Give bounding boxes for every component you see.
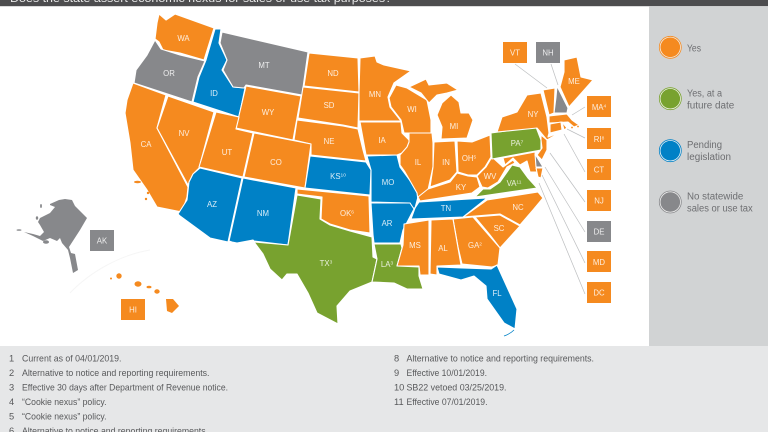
state: NJ: [537, 135, 547, 160]
state: TX: TX: [320, 259, 330, 268]
legend item: Yes, at a future date: future date: [687, 100, 735, 112]
state: PA: [491, 127, 541, 159]
legend item: Yes: [659, 36, 701, 58]
state: SC: SC: [494, 224, 505, 233]
state: SD: [298, 87, 359, 128]
callout: NH: NH: [542, 48, 554, 58]
state: CO: [244, 133, 311, 188]
state: MD: [503, 152, 543, 178]
callout: AK: AK: [97, 236, 108, 246]
state: NE: [294, 120, 366, 161]
state: IA: IA: [378, 136, 386, 145]
legend item: Yes, at a future date: [659, 88, 735, 112]
state: NM: [229, 178, 296, 245]
state: WA: [155, 14, 214, 60]
state: OH: 5: [474, 154, 477, 160]
footnotes right column: [394, 353, 594, 407]
callout: RI: [587, 128, 611, 149]
state: OK: [297, 189, 370, 233]
state: OR: [134, 40, 205, 102]
callout: NJ: [587, 190, 611, 211]
state: WV: WV: [484, 172, 497, 181]
state: KY: KY: [456, 183, 467, 192]
leader lines: [515, 64, 585, 294]
map of US states: [16, 14, 593, 336]
icon: Florida Keys: [504, 330, 514, 336]
header bar: [0, 0, 768, 6]
state: KS: 10: [341, 172, 346, 178]
footnotes left column: 5: [9, 412, 14, 422]
state: NC: [463, 192, 543, 225]
state: HI: [110, 273, 179, 313]
callout: MA: [587, 96, 611, 117]
footnotes left column: 3: [9, 382, 14, 392]
state: PA: 7: [521, 140, 524, 146]
state: GA: [453, 217, 500, 267]
state: RI: [562, 122, 567, 130]
state: NY: [497, 93, 561, 140]
state: ME: [560, 57, 593, 107]
footnotes right column: 10: [394, 382, 404, 392]
state: CT: [550, 122, 562, 133]
state: ME: ME: [568, 77, 580, 86]
state: MO: MO: [382, 178, 394, 187]
state: IN: [430, 141, 457, 187]
state: VA: VA: [507, 179, 516, 188]
callout: RI: 8: [602, 136, 605, 142]
state: ID: ID: [210, 89, 218, 98]
footnotes right column: Alternative to notice and reporting requirements.: [406, 353, 594, 363]
state: CO: CO: [270, 158, 282, 167]
state: AL: AL: [438, 244, 448, 253]
callout: VT: VT: [510, 48, 520, 58]
state: OH: OH: [462, 154, 474, 163]
state: CA: CA: [141, 140, 152, 149]
state: WI: WI: [407, 105, 417, 114]
state: LA: [372, 244, 423, 289]
state: SD: SD: [324, 101, 335, 110]
state: DE: [535, 154, 543, 167]
state: VA: 11: [516, 180, 522, 186]
callout: NH: [536, 42, 560, 63]
footnotes left column: “Cookie nexus” policy.: [22, 397, 106, 407]
state: MS: MS: [409, 241, 421, 250]
footnotes left column: Current as of 04/01/2019.: [22, 353, 122, 363]
callout: MA: MA: [592, 103, 604, 112]
callout: HI: HI: [129, 306, 137, 314]
state: WV: [477, 157, 515, 188]
state: MN: [359, 56, 411, 121]
state: AZ: [178, 168, 242, 242]
footnotes left column: 1: [9, 353, 14, 363]
state: UT: UT: [222, 148, 232, 157]
footnotes right column: 9: [394, 368, 399, 378]
state: VT: [543, 88, 555, 115]
footnotes left column: “Cookie nexus” policy.: [22, 412, 106, 422]
footnotes left column: 2: [9, 368, 14, 378]
state: FL: FL: [492, 289, 502, 298]
panel: legend: [649, 6, 768, 346]
state: MI: MI: [450, 122, 458, 131]
callout: DC: [587, 282, 611, 303]
state: AZ: AZ: [207, 200, 217, 209]
state: AK: [16, 199, 87, 273]
footnotes left column: 4: [9, 397, 14, 407]
state: MI: [409, 79, 473, 139]
state: MO: [367, 155, 418, 208]
state: NM: NM: [257, 209, 269, 218]
callout: MD: MD: [593, 258, 605, 267]
state: UT: [199, 112, 253, 177]
footnotes left column: [9, 353, 228, 432]
state: KS: [305, 156, 371, 195]
footnotes right column: Effective 07/01/2019.: [406, 397, 488, 407]
state: NC: NC: [512, 203, 524, 212]
state: ND: [304, 53, 359, 92]
callout: RI: RI: [594, 135, 602, 144]
state: OK: OK: [340, 209, 351, 218]
footnotes right column: 8: [394, 353, 399, 363]
legend item: Pending legislation: [659, 140, 731, 163]
state: FL: [437, 265, 517, 329]
state: OR: OR: [163, 69, 175, 78]
state: PA: PA: [511, 139, 521, 148]
state: GA: GA: [468, 241, 479, 250]
state: TX: [254, 195, 377, 324]
callout: CT: CT: [594, 166, 604, 174]
icon: California islands: [134, 181, 149, 200]
callout: MD: [587, 251, 611, 272]
state: ID: [193, 29, 245, 117]
state: AR: AR: [382, 219, 393, 228]
background panel: map area: [0, 6, 649, 346]
icon: Massachusetts islands: [571, 126, 579, 128]
state: ND: ND: [327, 69, 339, 78]
state: VA: [475, 165, 537, 197]
state: NH: [554, 86, 568, 113]
state: IA: [360, 122, 410, 155]
legend item: Yes: Yes: [687, 43, 701, 54]
panel: footnotes: [0, 346, 768, 432]
state: LA: 3: [390, 260, 393, 266]
state: OK: 6: [351, 210, 354, 216]
legend item: Pending legislation: legislation: [687, 152, 731, 163]
state: GA: 2: [479, 242, 482, 248]
state: AR: [371, 203, 414, 243]
state: TN: [411, 198, 487, 219]
state: IN: IN: [442, 158, 450, 167]
legend item: Yes, at a future date: Yes, at a: [687, 88, 722, 100]
state: LA: LA: [381, 260, 390, 269]
footnotes left column: Effective 30 days after Department of Revenue notice.: [22, 382, 228, 392]
state: IL: IL: [415, 158, 422, 167]
state: OH: [457, 135, 491, 175]
state: WY: WY: [262, 108, 275, 117]
callout: MA: 4: [604, 104, 607, 110]
callout: VT: [503, 42, 527, 63]
state: IL: [400, 133, 433, 200]
state: MT: MT: [258, 61, 270, 70]
state: KY: [418, 173, 480, 201]
state: MS: [397, 220, 429, 275]
footnotes right column: SB22 vetoed 03/25/2019.: [406, 382, 506, 392]
callout: DC: DC: [593, 288, 605, 298]
legend item: Pending legislation: Pending: [687, 140, 722, 151]
state: WA: WA: [177, 34, 190, 43]
legend item: No statewide sales or use tax: sales or use tax: [687, 204, 753, 214]
state: MA: [549, 114, 579, 127]
state: NV: [157, 96, 214, 185]
callout: DE: [587, 221, 611, 242]
state: NY: NY: [528, 110, 539, 119]
state: NV: NV: [179, 129, 190, 138]
callout: HI: [121, 299, 145, 320]
state: KS: KS: [330, 172, 341, 181]
legend item: No statewide sales or use tax: [659, 191, 753, 214]
state: AL: [430, 219, 461, 275]
footnotes right column: 11: [394, 397, 404, 407]
callout: DE: DE: [594, 228, 604, 236]
state: WI: [389, 85, 431, 133]
state: MN: MN: [369, 90, 381, 99]
state: MT: [220, 32, 308, 95]
state: NE: NE: [324, 137, 334, 146]
state: SC: [475, 215, 520, 248]
state: WY: [236, 86, 301, 140]
legend item: No statewide sales or use tax: No statewide: [687, 192, 744, 202]
callout: NJ: NJ: [594, 196, 604, 206]
state: CA: [125, 83, 188, 212]
callout: AK: [90, 230, 114, 251]
state: TX: 3: [330, 260, 333, 266]
callout: CT: [587, 159, 611, 180]
state: TN: TN: [441, 204, 451, 213]
footnotes left column: Alternative to notice and reporting requirements.: [22, 368, 210, 378]
footnotes right column: Effective 10/01/2019.: [406, 368, 487, 378]
